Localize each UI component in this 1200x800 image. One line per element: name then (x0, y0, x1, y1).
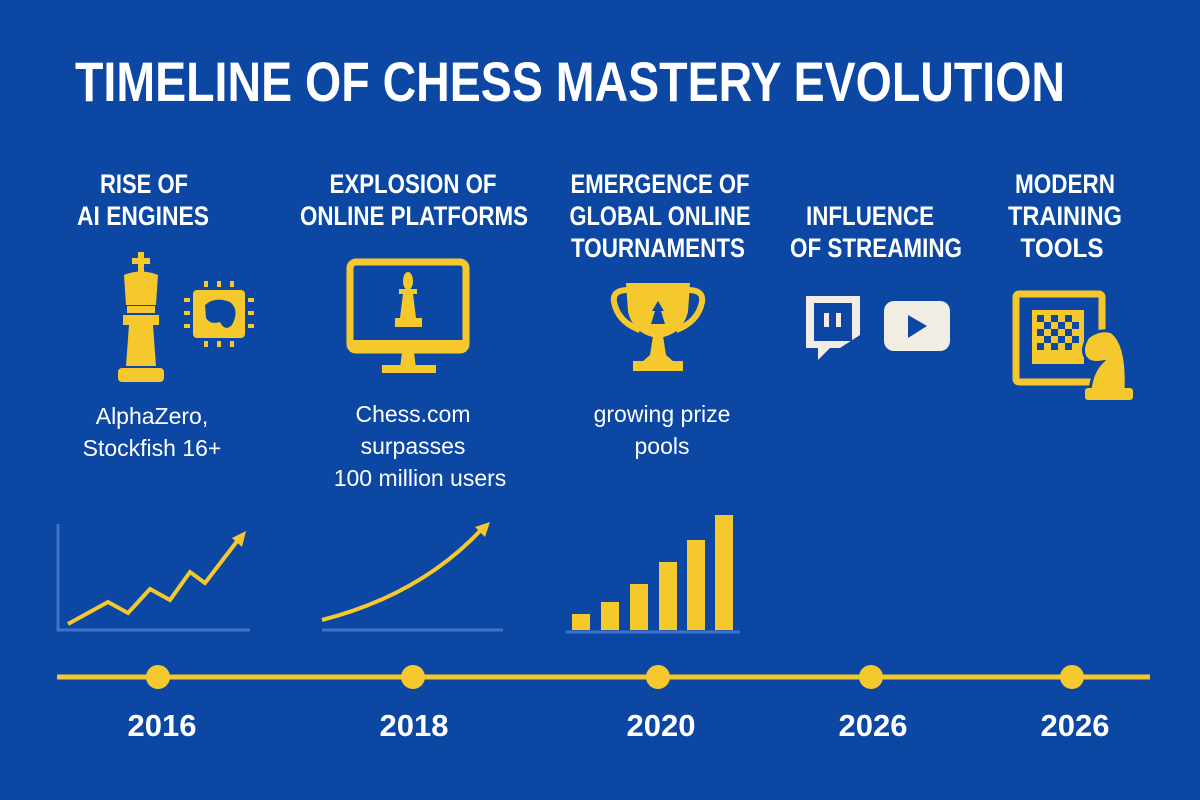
icon: twitch and youtube (806, 296, 950, 360)
caption: Chess.com: surpasses (361, 433, 465, 459)
heading: rise of AI engines: AI ENGINES (77, 201, 209, 231)
years (128, 708, 1109, 743)
caption: prize pools: pools (635, 433, 689, 459)
heading: emergence of global online tournaments (570, 169, 750, 263)
heading: modern training tools: TRAINING (1008, 201, 1122, 231)
heading: modern training tools: TOOLS (1020, 233, 1104, 263)
years: 2026 (839, 708, 907, 743)
caption: AlphaZero: Stockfish 16+ (83, 435, 221, 461)
caption: prize pools: growing prize (594, 401, 730, 427)
heading: explosion of online platforms (300, 169, 528, 231)
icon: chessboard with knight (1016, 294, 1133, 400)
heading: modern training tools (1008, 169, 1122, 263)
icon: king and AI chip (118, 252, 254, 382)
caption: Chess.com: 100 million users (334, 465, 506, 491)
heading: explosion of online platforms: ONLINE PLATFORMS (300, 201, 528, 231)
caption: AlphaZero (83, 403, 221, 461)
heading: rise of AI engines: RISE OF (100, 169, 188, 199)
caption: AlphaZero: AlphaZero, (96, 403, 208, 429)
chart: bars (566, 515, 740, 632)
heading: emergence of global online tournaments: EMERGENCE OF (570, 169, 750, 199)
icon: monitor with bishop (350, 262, 466, 373)
heading: modern training tools: MODERN (1015, 169, 1115, 199)
heading: explosion of online platforms: EXPLOSION OF (330, 169, 496, 199)
timeline (57, 665, 1150, 689)
years: 2016 (128, 708, 196, 743)
heading: influence of streaming: OF STREAMING (790, 233, 962, 263)
caption: Chess.com (334, 401, 506, 491)
heading: influence of streaming: INFLUENCE (806, 201, 934, 231)
icon: trophy (614, 283, 702, 371)
years: 2018 (380, 708, 448, 743)
caption: prize pools (594, 401, 730, 459)
chart: curve (322, 522, 503, 630)
chart: zigzag line (58, 524, 250, 630)
caption: Chess.com: Chess.com (355, 401, 471, 427)
heading: emergence of global online tournaments: TOURNAMENTS (571, 233, 745, 263)
heading: influence of streaming (790, 201, 962, 263)
years: 2020 (627, 708, 695, 743)
years: 2026 (1041, 708, 1109, 743)
heading: rise of AI engines (77, 169, 209, 231)
heading: emergence of global online tournaments: GLOBAL ONLINE (570, 201, 750, 231)
